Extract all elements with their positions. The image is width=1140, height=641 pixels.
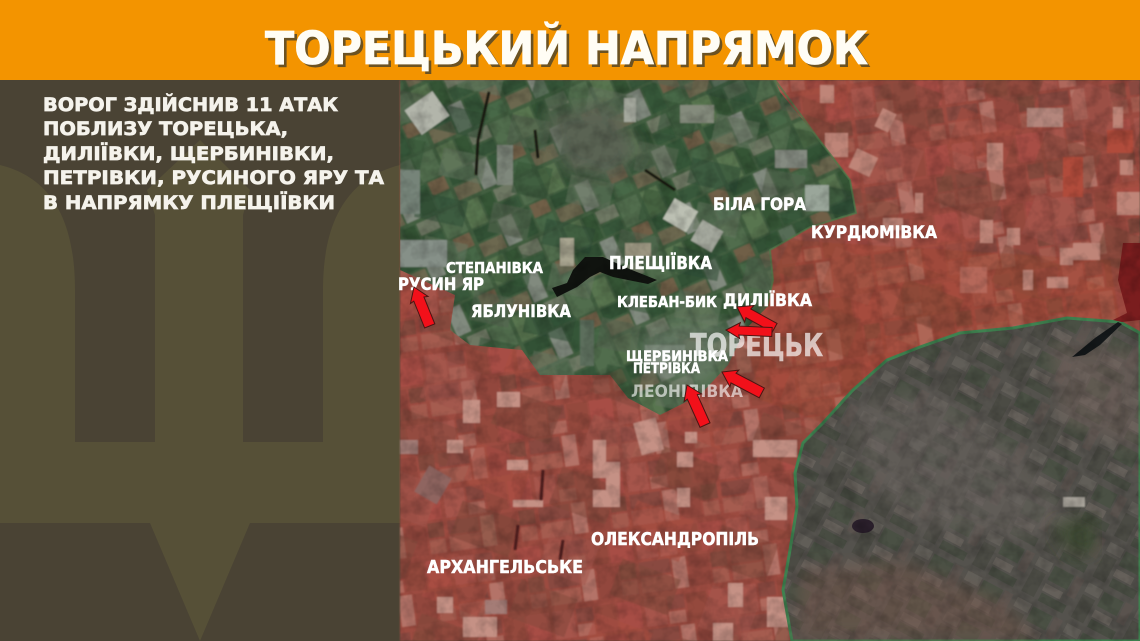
green border line — [767, 80, 856, 307]
summary text: ПОБЛИЗУ ТОРЕЦЬКА, — [43, 118, 288, 140]
label: Pleshchiivka: ПЛЕЩІЇВКА — [609, 252, 712, 274]
label: Kurdiumivka: КУРДЮМІВКА — [811, 223, 938, 243]
label: Rusyn Yar: РУСИН ЯР — [398, 275, 484, 295]
green controlled territory — [400, 80, 860, 420]
pale fields: green zone — [400, 91, 829, 366]
trident emblem — [0, 140, 400, 641]
reservoir — [552, 257, 657, 297]
arrow: Rusyn Yar — [405, 283, 439, 330]
label: Bila Hora: БІЛА ГОРА — [713, 195, 807, 215]
arrow: Dyliivka — [732, 299, 779, 336]
label: Yablunivka: ЯБЛУНІВКА — [471, 302, 572, 322]
water — [1072, 322, 1122, 357]
label: Dyliivka: ДИЛІЇВКА — [723, 289, 813, 311]
summary text: В НАПРЯМКУ ПЛЕЩІЇВКИ — [43, 190, 335, 214]
northeast fields — [1050, 340, 1140, 450]
urban core — [850, 390, 1070, 540]
label: Arkhanhelske: АРХАНГЕЛЬСЬКЕ — [427, 557, 583, 578]
arrow: Shcherbynivka — [718, 364, 766, 401]
attack arrows — [405, 283, 779, 429]
summary text: ВОРОГ ЗДІЙСНИВ 11 АТАК — [43, 93, 338, 116]
title bar — [0, 0, 1140, 80]
pale fields: north-east — [820, 85, 1140, 293]
place labels — [398, 195, 938, 578]
dark pond — [852, 519, 874, 533]
arrow: Toretsk — [726, 322, 772, 340]
pale urban patch — [1063, 497, 1085, 507]
summary text: ДИЛІЇВКИ, ЩЕРБИНІВКИ, — [43, 141, 334, 165]
noise texture — [400, 80, 1140, 641]
summary text: ПЕТРІВКИ, РУСИНОГО ЯРУ ТА — [43, 167, 384, 189]
label: Oleksandropil: ОЛЕКСАНДРОПІЛЬ — [591, 529, 759, 550]
label: Kleban-Byk: КЛЕБАН-БИК — [617, 293, 718, 311]
pale fields: south — [400, 392, 797, 641]
town of Kostiantynivka — [545, 105, 640, 180]
dark red north-east lagoon — [1113, 243, 1140, 322]
label: Shcherbynivka: ЩЕРБИНІВКА — [626, 349, 728, 365]
forest patch — [1050, 515, 1097, 560]
arrow: Leonidivka — [678, 381, 714, 429]
ravines — [476, 92, 705, 265]
summary text — [43, 93, 384, 214]
label: Petrivka: ПЕТРІВКА — [633, 361, 700, 377]
label: Toretsk: ТОРЕЦЬК — [690, 328, 823, 364]
reddish south-east fields — [795, 560, 1040, 641]
title: ТОРЕЦЬКИЙ НАПРЯМОК — [268, 25, 871, 78]
map — [400, 80, 1140, 641]
red tint: eastern occupied area — [745, 240, 1120, 423]
ravines in south — [515, 470, 563, 560]
title: ТОРЕЦЬКИЙ НАПРЯМОК — [265, 22, 868, 75]
grey city area — [783, 318, 1140, 641]
label: Stepanivka: СТЕПАНІВКА — [446, 259, 543, 277]
label: Leonidivka: ЛЕОНІДІВКА — [631, 382, 744, 402]
